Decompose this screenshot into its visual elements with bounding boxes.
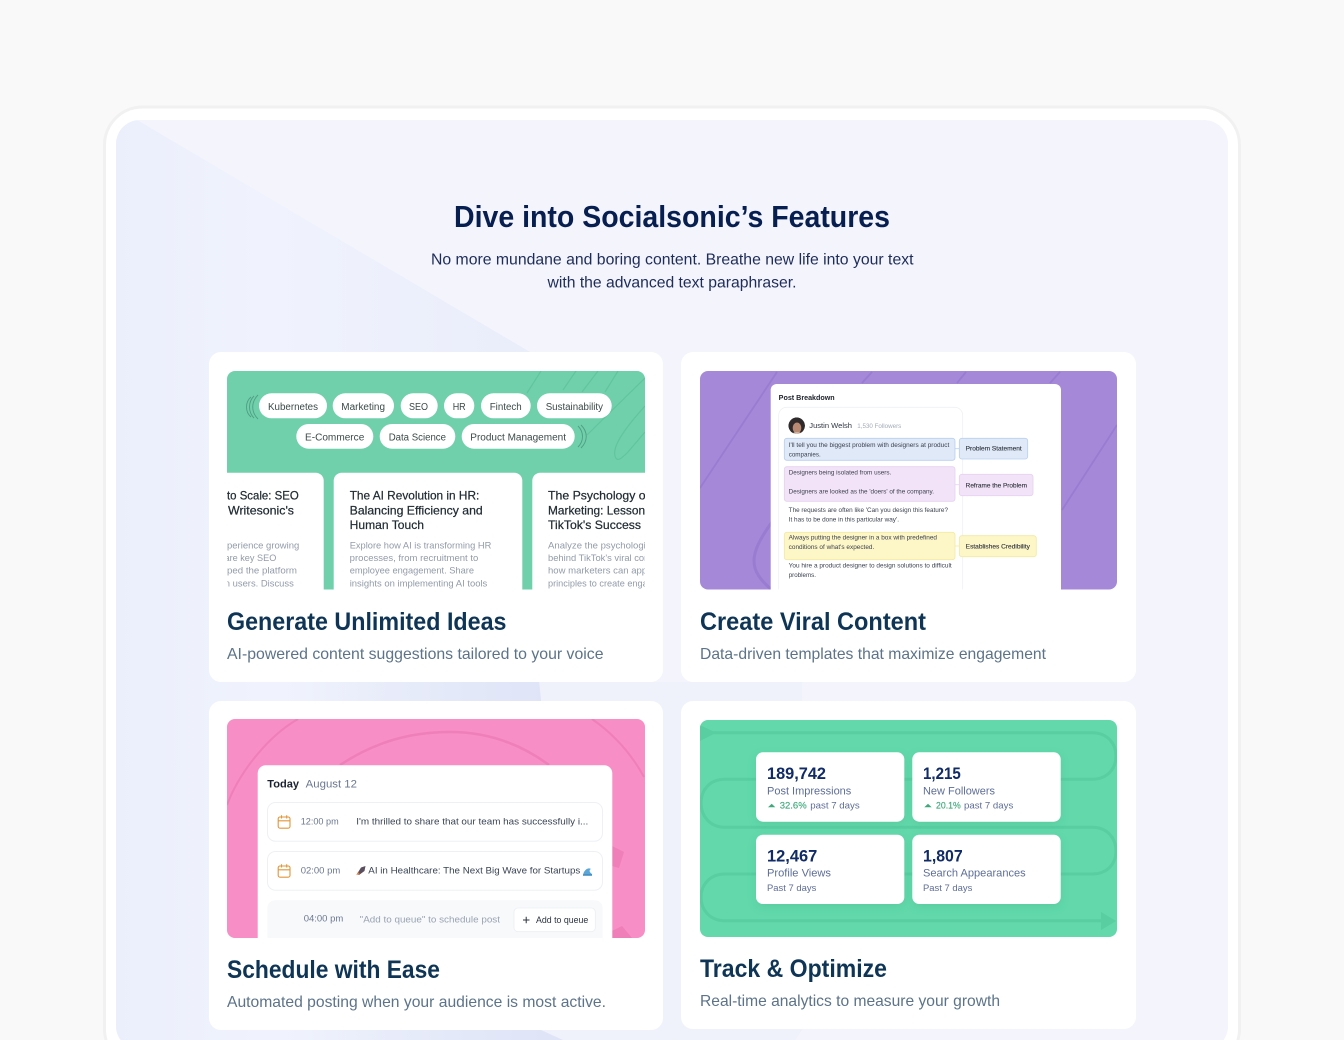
- article card middle: employee engagement. Share: [350, 566, 474, 576]
- schedule row 3: [304, 908, 596, 932]
- schedule illustration: [227, 719, 645, 938]
- description: track: Real-time analytics to measure your growth: [700, 993, 1000, 1010]
- stat: new followers: New Followers: [923, 785, 995, 797]
- heading: [431, 199, 914, 292]
- schedule row 2: AI in Healthcare: The Next Big Wave for Startups: [368, 866, 581, 877]
- article card middle: Human Touch: [350, 518, 424, 532]
- plain post text: It has to be done in this particular way'.: [789, 516, 899, 523]
- topic chips: Marketing: [341, 402, 385, 413]
- reframe block: Reframe the Problem: [966, 482, 1027, 489]
- title: Dive into Socialsonic’s Features: [454, 199, 890, 234]
- stat: search appearances: [912, 835, 1061, 904]
- schedule row 1: [268, 802, 602, 841]
- topic chips: Kubernetes: [268, 402, 318, 413]
- panel: track and optimize: [681, 701, 1136, 1029]
- problem statement block: [784, 438, 1028, 460]
- stat: search appearances: Search Appearances: [923, 867, 1026, 879]
- winding arrow path: [700, 725, 1116, 930]
- reframe block: [784, 467, 1033, 501]
- article card right: principles to create engaging: [548, 578, 665, 590]
- subtitle line 1: No more mundane and boring content. Breathe new life into your text: [431, 252, 914, 268]
- article card right: Analyze the psychological: [548, 540, 658, 552]
- article card middle: insights on implementing AI tools: [350, 578, 488, 590]
- article card left: Writesonic's: [228, 504, 294, 518]
- article card left: ped the platform: [227, 566, 297, 576]
- reframe block: Designers are looked as the 'doers' of the company.: [789, 488, 934, 495]
- topic chips: Product Management: [470, 432, 566, 443]
- closing post text: [789, 563, 952, 579]
- schedule row 2: 02:00 pm: [301, 866, 340, 877]
- schedule row 3: 04:00 pm: [304, 913, 343, 924]
- topic chips: E-Commerce: [305, 432, 365, 443]
- heading: schedule: Schedule with Ease: [227, 956, 440, 984]
- article card right: how marketers can apply: [548, 566, 654, 576]
- stat: profile views: Profile Views: [767, 867, 831, 879]
- breakdown sheet: Post Breakdown: [779, 395, 835, 402]
- heading: track: Track & Optimize: [700, 955, 887, 983]
- topic chips: HR: [453, 402, 466, 413]
- breakdown sheet: [770, 384, 1061, 590]
- heading: generate: Generate Unlimited Ideas: [227, 608, 506, 636]
- article card middle: processes, from recruitment to: [350, 553, 478, 564]
- stat: post impressions: Post Impressions: [767, 785, 852, 797]
- problem statement block: Problem Statement: [966, 446, 1022, 453]
- heading: viral: Create Viral Content: [700, 608, 927, 636]
- stat: post impressions: 32.6%: [780, 801, 807, 812]
- panel: create viral content: [681, 352, 1136, 682]
- stat: new followers: [912, 752, 1061, 822]
- topic chips: Fintech: [490, 402, 522, 413]
- article card middle: Balancing Efficiency and: [350, 504, 483, 518]
- stat: profile views: 12,467: [767, 846, 817, 865]
- parentheses right: [578, 425, 586, 448]
- article card left: n users. Discuss: [225, 578, 294, 590]
- stat: search appearances: Past 7 days: [923, 883, 973, 894]
- icon: rocket: [356, 866, 366, 875]
- stat: search appearances: 1,807: [923, 846, 963, 865]
- article card left: to Scale: SEO: [227, 489, 299, 503]
- reframe block: Designers being isolated from users.: [789, 470, 892, 477]
- stat: profile views: Past 7 days: [767, 883, 817, 894]
- background panel: [116, 120, 1228, 1040]
- description: viral: Data-driven templates that maximize engagement: [700, 646, 1047, 663]
- article card left: [227, 472, 324, 590]
- stat: post impressions: past 7 days: [810, 801, 860, 812]
- idea illustration: [227, 371, 645, 590]
- schedule sheet: August 12: [306, 778, 357, 790]
- stat: post impressions: 189,742: [767, 764, 826, 783]
- article card right: behind TikTok's viral content: [548, 553, 665, 564]
- plain post text: The requests are often like 'Can you design this feature?: [789, 507, 948, 514]
- schedule row 2: [268, 852, 602, 890]
- schedule row 1: I'm thrilled to share that our team has successfully i...: [356, 817, 588, 828]
- plain post text: [789, 507, 948, 523]
- icon: wave: [583, 868, 592, 876]
- credibility block: Establishes Credibility: [966, 544, 1031, 551]
- topic chips: SEO: [409, 402, 428, 413]
- stat: post impressions: [756, 752, 904, 822]
- topic chips: [259, 393, 612, 449]
- add to queue button: [514, 908, 595, 932]
- article card left: are key SEO: [224, 553, 276, 564]
- subtitle line 2: with the advanced text paraphraser.: [547, 274, 796, 292]
- closing post text: problems.: [789, 572, 816, 579]
- article card left: perience growing: [227, 540, 299, 552]
- credibility block: Always putting the designer in a box with predefined: [789, 535, 937, 542]
- device frame: [104, 107, 1240, 1040]
- article card right: The Psychology of: [548, 489, 650, 503]
- stat: new followers: 1,215: [923, 764, 961, 783]
- article card middle: The AI Revolution in HR:: [350, 489, 479, 503]
- add to queue button: Add to queue: [536, 915, 588, 925]
- description: schedule: Automated posting when your audience is most active.: [227, 994, 606, 1011]
- article card middle: Explore how AI is transforming HR: [350, 540, 491, 552]
- icon: calendar: [278, 815, 290, 828]
- post breakdown illustration: [700, 371, 1117, 590]
- schedule row 1: 12:00 pm: [301, 817, 339, 828]
- breakdown sheet: 1,530 Followers: [857, 424, 901, 430]
- stat: new followers: past 7 days: [964, 801, 1014, 812]
- schedule sheet: Today: [267, 778, 300, 790]
- description: generate: AI-powered content suggestions tailored to your voice: [227, 646, 604, 663]
- analytics illustration: [700, 720, 1117, 937]
- parentheses left: [246, 395, 258, 419]
- credibility block: conditions of what's expected.: [789, 544, 875, 551]
- panel: generate unlimited ideas: [190, 352, 692, 682]
- closing post text: You hire a product designer to design solutions to difficult: [789, 563, 952, 570]
- topic chips: Sustainability: [546, 402, 603, 413]
- panel: schedule with ease: [209, 701, 663, 1030]
- breakdown sheet: Justin Welsh: [809, 423, 852, 430]
- icon: calendar: [278, 864, 290, 877]
- article card middle: [334, 473, 522, 603]
- stat: profile views: [756, 835, 904, 904]
- article card right: Marketing: Lessons: [548, 504, 651, 518]
- article card right: TikTok's Success: [548, 518, 641, 532]
- schedule row 3: "Add to queue" to schedule post: [360, 915, 500, 926]
- article card right: [532, 472, 645, 590]
- credibility block: [784, 532, 1036, 560]
- schedule sheet: [258, 765, 612, 938]
- problem statement block: I'll tell you the biggest problem with designers at product: [789, 442, 950, 449]
- avatar: [788, 417, 805, 434]
- problem statement block: companies.: [789, 451, 821, 458]
- stat: new followers: 20.1%: [936, 801, 961, 812]
- topic chips: Data Science: [389, 432, 446, 443]
